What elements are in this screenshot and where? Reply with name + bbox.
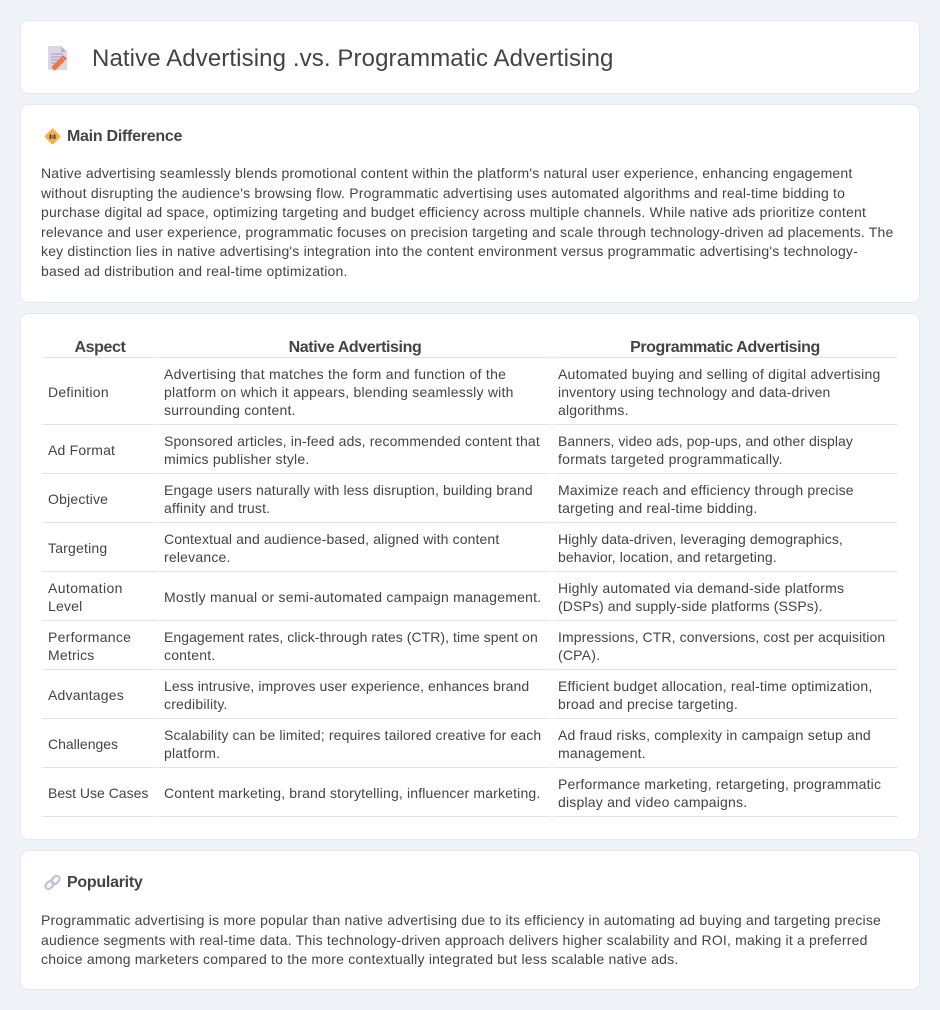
row: objective: affinity and trust. xyxy=(164,500,270,516)
text block: main difference xyxy=(41,165,893,279)
text block: popularity xyxy=(41,912,881,967)
row: definition: inventory using technology and data-driven xyxy=(558,384,830,400)
icon: document with pencil xyxy=(48,46,67,71)
text block: main difference: without disrupting the audience's browsing flow. Programmatic advertising uses automated algorithms and real-time bidding to xyxy=(41,184,845,200)
row: ad format: formats targeted programmatically. xyxy=(558,451,783,467)
text block: main difference: based ad distribution and real-time optimization. xyxy=(41,262,348,278)
row: targeting: relevance. xyxy=(164,549,231,565)
row: performance metrics: Engagement rates, click-through rates (CTR), time spent on xyxy=(164,629,538,645)
row: advantages: broad and precise targeting. xyxy=(558,696,738,712)
row: performance metrics: Performance xyxy=(48,629,131,645)
row: definition: algorithms. xyxy=(558,402,629,418)
row: ad format: Ad Format xyxy=(48,442,115,458)
row: definition xyxy=(48,366,881,418)
panel: comparison table xyxy=(20,313,920,840)
heading: main difference: Main Difference xyxy=(67,128,182,145)
row: best use cases: Best Use Cases xyxy=(48,785,148,801)
row: objective xyxy=(48,482,854,516)
row: best use cases xyxy=(48,776,881,810)
row: definition: Advertising that matches the form and function of the xyxy=(164,366,506,382)
table header: aspect: Aspect xyxy=(75,339,125,356)
row: challenges xyxy=(48,727,871,761)
row: targeting xyxy=(48,531,843,565)
row: objective: Engage users naturally with less disruption, building brand xyxy=(164,482,533,498)
row: advantages: Less intrusive, improves user experience, enhances brand xyxy=(164,678,529,694)
table header: programmatic advertising: Programmatic Advertising xyxy=(630,339,820,356)
row: advantages xyxy=(48,678,872,712)
row: definition: Definition xyxy=(48,384,109,400)
row: performance metrics xyxy=(48,629,885,663)
row: definition: surrounding content. xyxy=(164,402,296,418)
panel: popularity xyxy=(20,850,920,990)
row: challenges: Ad fraud risks, complexity in campaign setup and xyxy=(558,727,871,743)
row: advantages: Efficient budget allocation, real-time optimization, xyxy=(558,678,872,694)
row: ad format xyxy=(48,433,853,467)
row: targeting: Highly data-driven, leveraging demographics, xyxy=(558,531,843,547)
row: objective: targeting and real-time bidding. xyxy=(558,500,757,516)
text block: main difference: purchase digital ad space, optimizing targeting and budget efficiency across multiple channels. While native ads prioritize content xyxy=(41,204,866,220)
row: ad format: Sponsored articles, in-feed ads, recommended content that xyxy=(164,433,540,449)
row: automation level: Automation xyxy=(48,580,123,596)
row: challenges: management. xyxy=(558,745,646,761)
text block: popularity: Programmatic advertising is more popular than native advertising due to its efficiency in automating ad buying and targeting precise xyxy=(41,912,881,928)
row: automation level: (DSPs) and supply-side platforms (SSPs). xyxy=(558,598,823,614)
row: performance metrics: Metrics xyxy=(48,647,95,663)
text block: main difference: relevance and user experience, programmatic focuses on precision targeting and scale through technology-driven ad placements. The xyxy=(41,224,893,240)
row: challenges: platform. xyxy=(164,745,220,761)
panel: header xyxy=(20,20,920,94)
row: automation level xyxy=(48,580,844,614)
text block: popularity: choice among marketers compared to the more contextually integrated but less scalable native ads. xyxy=(41,951,678,967)
heading: popularity: Popularity xyxy=(67,874,143,891)
row: targeting: Contextual and audience-based, aligned with content xyxy=(164,531,499,547)
row: advantages: Advantages xyxy=(48,687,124,703)
row: challenges: Scalability can be limited; requires tailored creative for each xyxy=(164,727,541,743)
icon: warning diamond xyxy=(44,128,60,144)
text block: main difference: Native advertising seamlessly blends promotional content within the platform's natural user experience, enhancing engagement xyxy=(41,165,852,181)
row: advantages: credibility. xyxy=(164,696,228,712)
text block: main difference: key distinction lies in native advertising's integration into the content environment versus programmatic advertising's technology- xyxy=(41,243,858,259)
row: automation level: Mostly manual or semi-automated campaign management. xyxy=(164,589,541,605)
row: performance metrics: content. xyxy=(164,647,215,663)
panel: main difference xyxy=(20,104,920,303)
row: definition: platform on which it appears, blending seamlessly with xyxy=(164,384,514,400)
row: performance metrics: Impressions, CTR, conversions, cost per acquisition xyxy=(558,629,885,645)
icon: chain link xyxy=(44,874,61,890)
row: definition: Automated buying and selling of digital advertising xyxy=(558,366,881,382)
title: Native Advertising .vs. Programmatic Advertising xyxy=(92,45,613,72)
row: automation level: Highly automated via demand-side platforms xyxy=(558,580,844,596)
row: automation level: Level xyxy=(48,598,82,614)
row: best use cases: Performance marketing, retargeting, programmatic xyxy=(558,776,881,792)
row: performance metrics: (CPA). xyxy=(558,647,600,663)
row: targeting: Targeting xyxy=(48,540,107,556)
row: best use cases: Content marketing, brand storytelling, influencer marketing. xyxy=(164,785,540,801)
row: challenges: Challenges xyxy=(48,736,118,752)
row: targeting: behavior, location, and retargeting. xyxy=(558,549,777,565)
table header: native advertising: Native Advertising xyxy=(289,339,421,356)
row: ad format: Banners, video ads, pop-ups, and other display xyxy=(558,433,853,449)
row: objective: Objective xyxy=(48,491,108,507)
row: ad format: mimics publisher style. xyxy=(164,451,309,467)
text block: popularity: audience segments with real-time data. This technology-driven approach delivers higher scalability and ROI, making it a preferred xyxy=(41,932,868,948)
row: best use cases: display and video campaigns. xyxy=(558,794,747,810)
row: objective: Maximize reach and efficiency through precise xyxy=(558,482,854,498)
